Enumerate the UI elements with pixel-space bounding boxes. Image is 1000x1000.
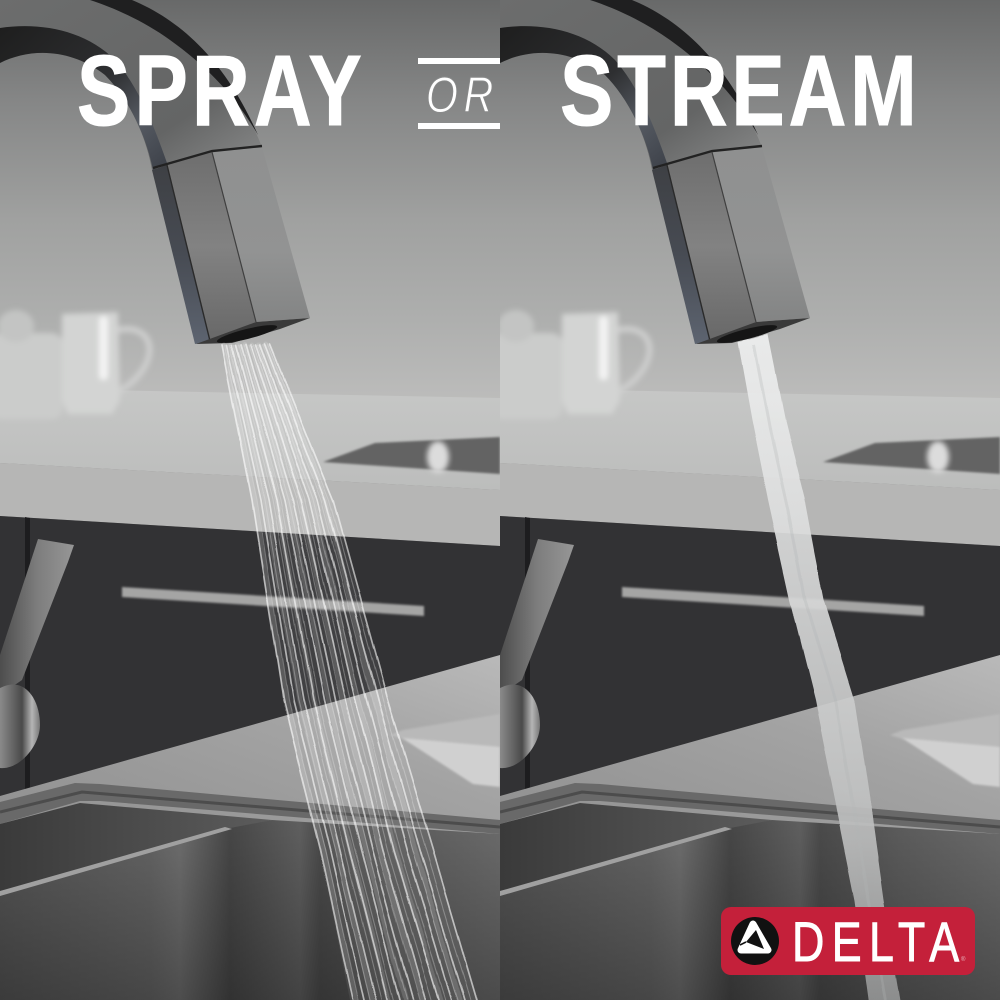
sink wall shade [0, 820, 500, 1000]
OR top rule [418, 58, 500, 64]
spray head [152, 146, 310, 346]
stream body [738, 335, 902, 1000]
head seam [153, 146, 262, 168]
head edge left [167, 165, 210, 341]
OR bottom rule [418, 123, 500, 129]
panel: stream [500, 0, 1000, 1000]
spray water strands [222, 345, 477, 1000]
stream streaks [754, 345, 886, 1000]
cabinet handle [122, 587, 424, 616]
logo wordmark: DELTA [792, 910, 959, 973]
water stream [738, 335, 902, 1000]
sink wall [0, 820, 500, 1000]
head middle face [167, 152, 256, 341]
sink deck reflection [0, 803, 272, 893]
gooseneck underside band [0, 26, 167, 170]
back sink [323, 437, 500, 474]
sink rim [0, 783, 500, 834]
head left face [152, 165, 210, 344]
nozzle tips [216, 322, 278, 346]
rim highlight [0, 792, 500, 827]
spray water haze [222, 345, 477, 1000]
icon: Delta tripoint mark [731, 917, 779, 965]
dark cabinet [0, 516, 500, 800]
faucet gooseneck [0, 0, 262, 170]
nozzle [196, 318, 310, 344]
cups [0, 310, 150, 419]
sink corner highlight [0, 827, 232, 896]
heading: OR [418, 58, 500, 129]
lever handle [0, 539, 74, 695]
photo scene: kitchen with faucet [0, 0, 500, 1000]
registered mark: ® [961, 956, 966, 963]
back counter top [0, 388, 500, 490]
photo scene repeated [490, 0, 1000, 1000]
wall [0, 0, 500, 400]
heading: SPRAY: SPRAY [77, 36, 362, 147]
head right face [212, 147, 310, 322]
plate [390, 714, 500, 787]
logo: Delta [721, 907, 975, 975]
cabinet gap [25, 517, 30, 792]
OR text: OR [426, 67, 493, 123]
gooseneck body [0, 0, 262, 170]
gooseneck outer dark band [90, 0, 258, 135]
logo red badge [721, 907, 975, 975]
island counter [0, 655, 500, 840]
counter front edge [0, 463, 500, 546]
panel: spray [0, 0, 500, 1000]
lever base knob [0, 684, 40, 768]
head edge [212, 152, 256, 322]
heading: STREAM: STREAM [560, 36, 917, 147]
